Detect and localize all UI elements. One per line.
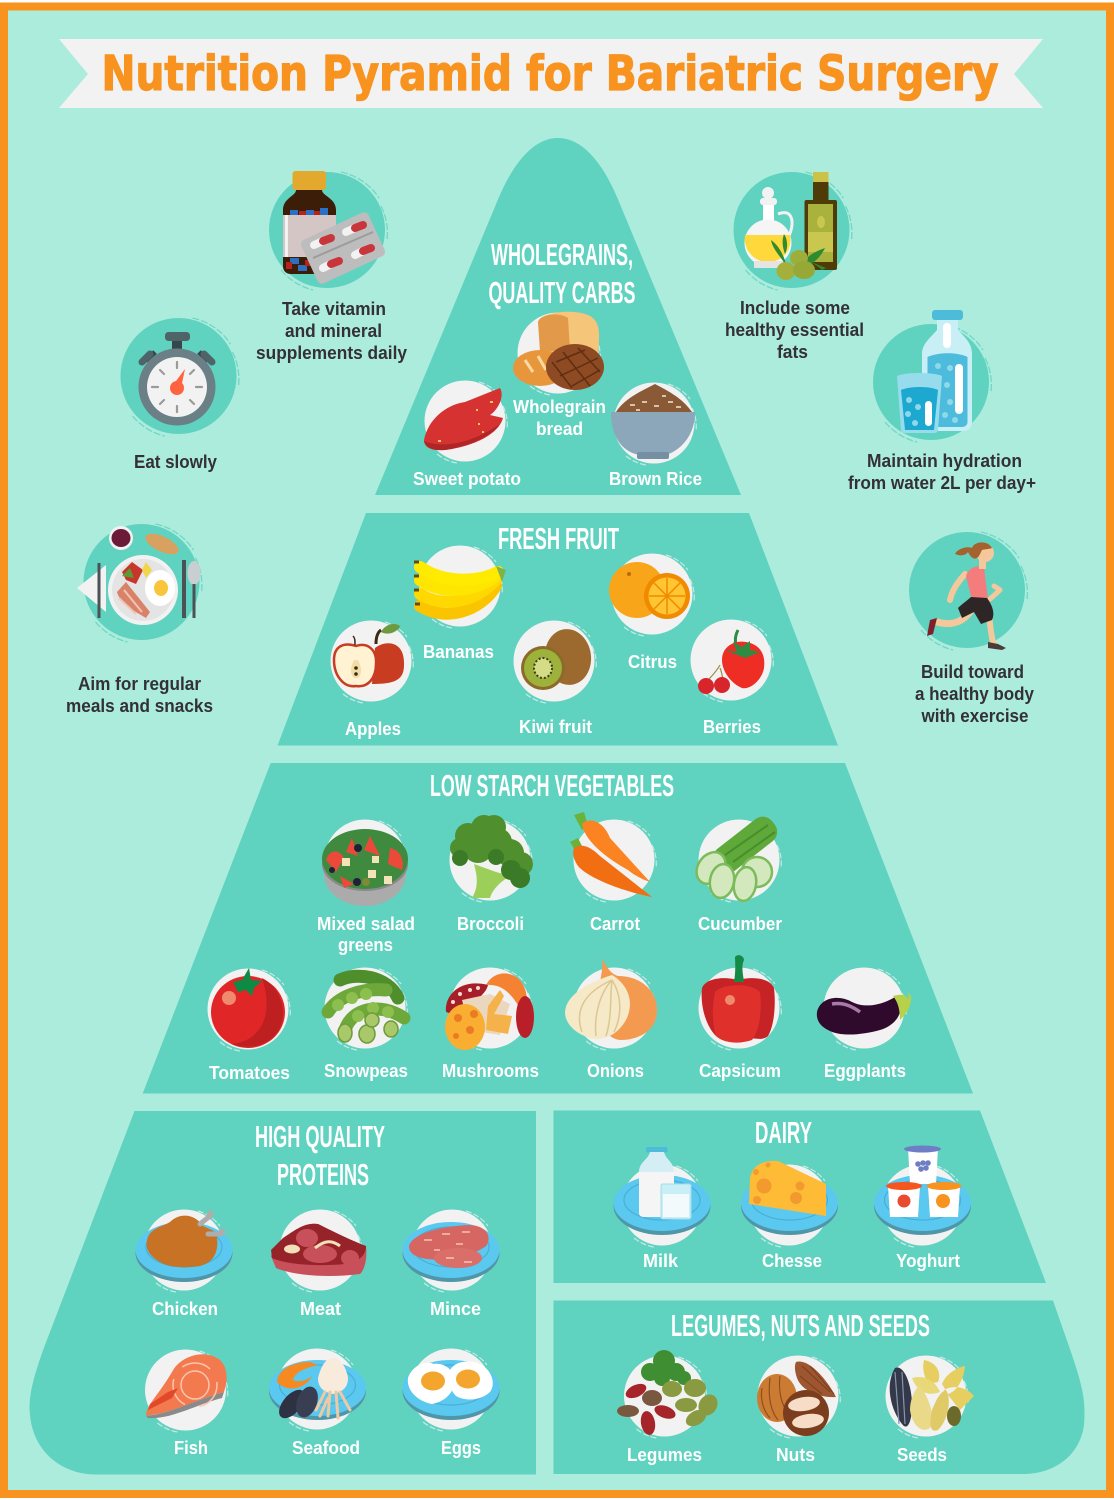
icon: chicken	[136, 1210, 232, 1292]
icon: brown rice	[611, 382, 696, 465]
tip: exercise	[909, 532, 1035, 726]
text: exercise: Build toward	[921, 661, 1024, 682]
label: brown rice: Brown Rice	[609, 468, 702, 489]
text: regular meals	[66, 673, 213, 716]
icon: legumes	[617, 1350, 721, 1438]
tip: hydration	[848, 310, 1036, 493]
label: carrot: Carrot	[590, 913, 640, 934]
text: vitamins: Take vitamin	[282, 298, 386, 319]
label: snowpeas: Snowpeas	[324, 1060, 408, 1081]
heading: high quality proteins	[255, 1119, 385, 1192]
icon: stopwatch	[120, 318, 239, 436]
icon: carrot	[570, 812, 656, 902]
heading: high quality proteins: HIGH QUALITY	[255, 1119, 385, 1154]
label: mixed salad greens: greens	[338, 934, 393, 955]
text: exercise	[915, 661, 1035, 726]
panel: high quality proteins tier	[30, 1111, 536, 1474]
text: regular meals: meals and snacks	[66, 695, 213, 716]
heading: low starch vegetables: LOW STARCH VEGETABLES	[430, 768, 674, 803]
icon: mixed salad greens	[322, 820, 408, 906]
icon: fish	[145, 1350, 228, 1432]
label: wholegrain bread: Wholegrain	[513, 396, 606, 417]
tip: vitamins	[256, 171, 408, 363]
label: eggs: Eggs	[441, 1437, 481, 1458]
label: apples: Apples	[345, 718, 401, 739]
icon: bananas	[414, 546, 506, 628]
label: cucumber: Cucumber	[698, 913, 782, 934]
icon: meat	[271, 1210, 366, 1292]
icon: tomatoes	[208, 968, 290, 1051]
label: citrus: Citrus	[628, 651, 677, 672]
icon: milk	[614, 1147, 710, 1247]
icon: apples	[330, 620, 413, 703]
icon: capsicum	[698, 955, 781, 1050]
label: mixed salad greens: Mixed salad	[317, 913, 415, 934]
label: berries: Berries	[703, 716, 761, 737]
icon: citrus	[609, 554, 694, 636]
label: capsicum: Capsicum	[699, 1060, 781, 1081]
label: milk: Milk	[643, 1250, 679, 1271]
panel: low starch vegetables tier	[143, 763, 973, 1094]
icon: yoghurt	[874, 1146, 971, 1247]
text: vitamins: supplements daily	[256, 342, 408, 363]
icon: seeds	[886, 1356, 974, 1438]
heading: wholegrains: QUALITY CARBS	[488, 275, 636, 310]
icon: plate of food	[77, 524, 202, 642]
icon: snowpeas	[324, 968, 407, 1050]
label: wholegrain bread: bread	[536, 418, 583, 439]
icon: water bottle and glass	[873, 310, 991, 442]
panel: wholegrains tier	[375, 138, 741, 495]
icon: broccoli	[450, 815, 533, 902]
label: nuts: Nuts	[776, 1444, 815, 1465]
text: essential fats	[725, 297, 864, 362]
tip: regular meals	[66, 524, 213, 716]
text: vitamins	[256, 298, 408, 363]
icon: cheese	[741, 1161, 838, 1247]
label: onions: Onions	[587, 1060, 644, 1081]
icon: mushrooms	[445, 968, 534, 1050]
heading: fresh fruit: FRESH FRUIT	[498, 521, 619, 556]
heading: high quality proteins: PROTEINS	[277, 1157, 369, 1192]
tip: essential fats	[725, 172, 864, 362]
label: yoghurt: Yoghurt	[896, 1250, 960, 1271]
heading: legumes nuts and seeds: LEGUMES, NUTS AND SEEDS	[671, 1308, 930, 1343]
icon: mince	[402, 1210, 500, 1292]
label: eggplants: Eggplants	[824, 1060, 906, 1081]
heading: wholegrains: WHOLEGRAINS,	[491, 237, 633, 272]
label: broccoli: Broccoli	[457, 913, 524, 934]
text: hydration	[848, 450, 1036, 493]
label: mushrooms: Mushrooms	[442, 1060, 539, 1081]
icon: cucumber	[691, 812, 782, 903]
icon: berries	[690, 620, 773, 702]
label: bananas: Bananas	[423, 641, 494, 662]
title banner	[59, 39, 1043, 108]
label: wholegrain bread	[513, 396, 606, 439]
icon: eggplants	[817, 968, 911, 1050]
label: legumes: Legumes	[627, 1444, 702, 1465]
text: hydration: from water 2L per day+	[848, 472, 1036, 493]
text: exercise: a healthy body	[915, 683, 1035, 704]
label: cheese: Chesse	[762, 1250, 822, 1271]
panel: fresh fruit tier	[278, 513, 838, 746]
text: vitamins: and mineral	[285, 320, 382, 341]
text: exercise: with exercise	[921, 705, 1028, 726]
icon: sweet potato	[424, 380, 507, 463]
label: mixed salad greens	[317, 913, 415, 955]
icon: vitamin bottle and capsules	[269, 171, 387, 290]
text: essential fats: fats	[777, 341, 808, 362]
label: seafood: Seafood	[292, 1437, 360, 1458]
icon: seafood	[269, 1348, 366, 1431]
text: essential fats: Include some	[740, 297, 850, 318]
label: meat: Meat	[300, 1298, 341, 1319]
panel: dairy tier	[554, 1110, 1046, 1283]
tip: eat slowly	[120, 318, 239, 472]
text: hydration: Maintain hydration	[867, 450, 1022, 471]
label: tomatoes: Tomatoes	[209, 1062, 290, 1083]
text: eat slowly: Eat slowly	[134, 451, 218, 472]
label: kiwi fruit: Kiwi fruit	[519, 716, 592, 737]
icon: runner	[909, 532, 1027, 650]
icon: kiwi fruit	[514, 620, 596, 703]
icon: onions	[565, 958, 657, 1050]
panel: legumes nuts seeds tier	[554, 1300, 1084, 1474]
text: essential fats: healthy essential	[725, 319, 864, 340]
icon: oil jug and olive bottle	[734, 172, 852, 290]
label: fish: Fish	[174, 1437, 208, 1458]
icon: nuts	[757, 1356, 840, 1438]
label: sweet potato: Sweet potato	[413, 468, 521, 489]
icon: wholegrain bread	[513, 312, 604, 395]
text: regular meals: Aim for regular	[78, 673, 201, 694]
heading: wholegrains	[488, 237, 636, 310]
heading: dairy: DAIRY	[755, 1115, 812, 1150]
label: mince: Mince	[430, 1298, 481, 1319]
icon: eggs	[402, 1348, 500, 1431]
label: seeds: Seeds	[897, 1444, 947, 1465]
label: chicken: Chicken	[152, 1298, 218, 1319]
